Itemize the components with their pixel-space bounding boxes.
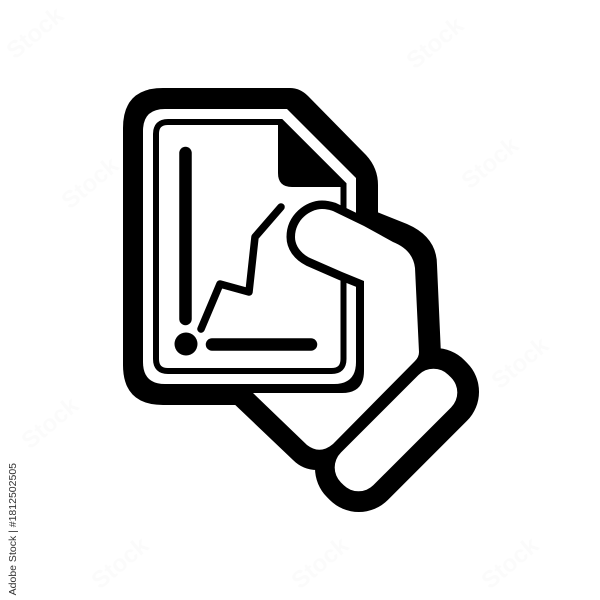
thumb outline	[295, 209, 372, 284]
faint stock watermarks: Stock	[57, 151, 124, 215]
line chart	[174, 153, 311, 356]
hand palm	[253, 226, 419, 450]
thumb	[295, 209, 372, 284]
icon: hand holding document	[123, 88, 496, 529]
faint stock watermarks: Stock	[287, 531, 354, 595]
document silhouette	[123, 88, 378, 405]
page outer white band	[143, 109, 356, 384]
document page	[143, 109, 356, 384]
page inner outline	[156, 122, 344, 371]
faint stock watermarks: Stock	[487, 331, 554, 395]
faint stock watermarks: Stock	[477, 531, 544, 595]
faint stock watermarks: Stock	[402, 11, 469, 75]
infographic canvas	[8, 88, 479, 596]
hand silhouette	[230, 212, 441, 470]
thumb fill	[295, 209, 364, 281]
faint stock watermarks: Stock	[2, 1, 69, 65]
chart vertical axis	[179, 153, 192, 319]
faint stock watermarks: Stock	[457, 131, 524, 195]
vertical stock id caption: Adobe Stock | #1812502505	[7, 463, 19, 595]
faint stock watermarks: Stock	[17, 391, 84, 455]
chart horizontal axis	[212, 338, 311, 351]
chart data line	[201, 207, 281, 329]
cuff outline	[298, 331, 496, 529]
page corner fold	[278, 124, 342, 187]
faint stock watermarks: Stock	[87, 531, 154, 595]
chart origin dot	[174, 332, 198, 356]
cuff opening	[326, 360, 466, 500]
